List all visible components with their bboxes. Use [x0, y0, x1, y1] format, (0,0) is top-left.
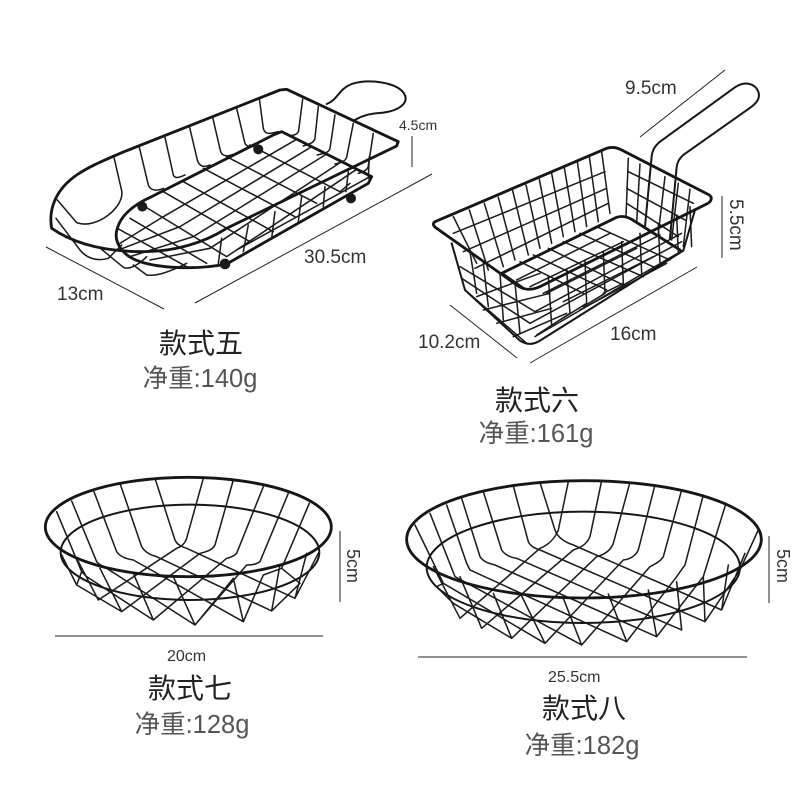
dimension: length line [195, 174, 432, 303]
radial wires [415, 481, 758, 645]
label 30.5cm: 30.5cm [304, 247, 366, 268]
handle loop [327, 81, 406, 120]
panel: style eight round basket [407, 481, 793, 760]
bottom frame [452, 210, 695, 344]
dimension: width line [46, 247, 164, 309]
dimension: length line [530, 267, 697, 363]
panel: style seven round basket [45, 477, 363, 739]
feet [137, 202, 147, 212]
weight style eight: 净重:182g [525, 732, 639, 760]
front wall wires [460, 207, 692, 343]
weight style six: 净重:161g [479, 420, 593, 448]
dimension: diameter line [418, 656, 747, 658]
panel: style five boat basket [46, 81, 437, 393]
weight style five: 净重:140g [143, 365, 257, 393]
title style six: 款式六 [495, 385, 579, 416]
floor rim [502, 217, 680, 288]
floor grid [517, 227, 670, 310]
basket five illustration [51, 81, 406, 275]
basket six illustration [433, 84, 759, 344]
title style eight: 款式八 [542, 693, 626, 724]
floor rim [116, 132, 372, 268]
label 5.5cm rotated: 5.5cm [725, 199, 746, 251]
label 13cm: 13cm [57, 284, 103, 305]
label 4.5cm: 4.5cm [399, 117, 437, 133]
dimension: handle line [640, 70, 725, 137]
basket eight illustration [407, 481, 761, 645]
panel: style six fry basket [418, 70, 759, 448]
title style five: 款式五 [159, 328, 243, 359]
dimension: height line [339, 531, 341, 602]
label 16cm: 16cm [610, 324, 656, 345]
dimension: width line [450, 305, 517, 358]
floor grid [117, 139, 370, 267]
label 9.5cm: 9.5cm [625, 78, 677, 99]
front wall wires [218, 157, 369, 263]
label 20cm: 20cm [167, 648, 206, 665]
title style seven: 款式七 [148, 673, 232, 704]
lower ring [427, 512, 740, 623]
label 25.5cm: 25.5cm [548, 669, 600, 686]
label 5cm rotated: 5cm [343, 549, 363, 583]
label 5cm rotated: 5cm [773, 549, 793, 583]
dimension: height line [721, 196, 723, 258]
nose underside wires [56, 218, 187, 275]
side wall wires [626, 158, 693, 247]
dimension: diameter line [55, 635, 323, 637]
basket seven illustration [45, 477, 331, 625]
back wall wires [453, 152, 610, 270]
radial wires [57, 478, 318, 625]
top rim [433, 147, 711, 289]
handle [645, 84, 759, 238]
top rim [407, 481, 761, 598]
outer rim [51, 89, 398, 252]
top rim [45, 477, 331, 577]
left wall wires [57, 98, 373, 224]
dimension: height line [768, 536, 770, 603]
label 10.2cm: 10.2cm [418, 332, 480, 353]
dimension: height line [411, 136, 413, 167]
lower ring [61, 505, 319, 600]
weight style seven: 净重:128g [135, 711, 249, 739]
